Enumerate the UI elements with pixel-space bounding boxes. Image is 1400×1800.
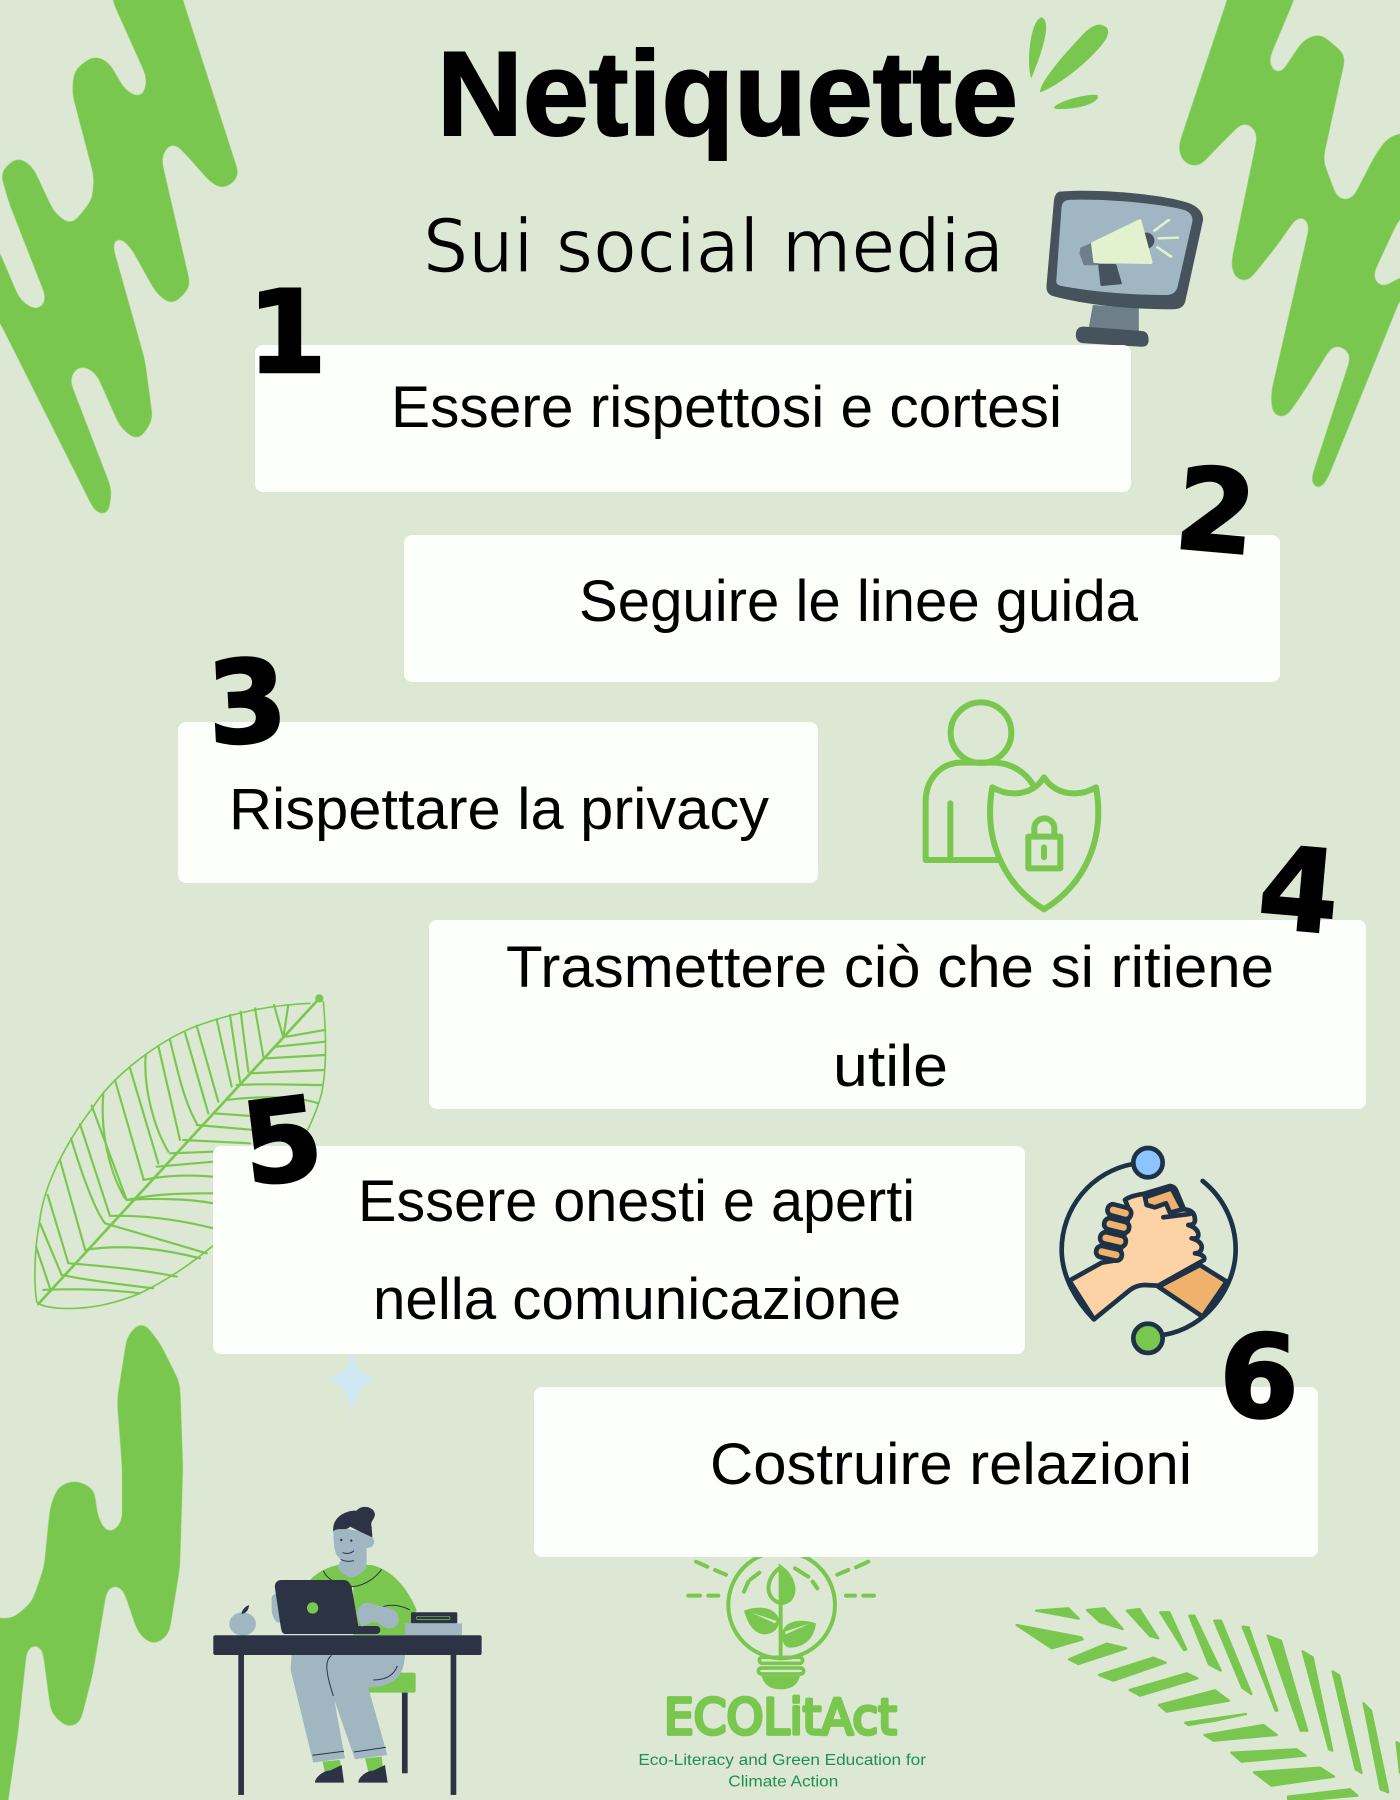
laptop: [272, 1580, 399, 1634]
panel: rule 4: [429, 821, 1366, 1109]
rule 4 text: Trasmettere ciò che si ritiene: [506, 935, 1274, 1000]
rule 2 text: Seguire le linee guida: [579, 569, 1139, 634]
rule 5 text: [358, 1169, 915, 1332]
panel: rule 2: [404, 442, 1280, 682]
illustration: person working at a desk: [213, 1507, 482, 1795]
illustration: outlined green leaf: [35, 995, 326, 1309]
number 4: 4: [1254, 821, 1344, 960]
rule 1 text: Essere rispettosi e cortesi: [391, 375, 1062, 440]
panel: rule 1: [247, 266, 1131, 492]
decoration: top-right green leaf blob: [1178, 0, 1400, 494]
logo tagline: [638, 1752, 926, 1791]
title: Netiquette: [437, 27, 1018, 161]
panel: rule 5: [213, 1071, 1025, 1354]
rule 5 text: Essere onesti e aperti: [358, 1169, 915, 1234]
number 2: 2: [1171, 442, 1261, 581]
number 3: 3: [204, 634, 290, 771]
panel: rule 3: [178, 634, 818, 883]
logo: ECOLitAct light bulb: [638, 1552, 926, 1791]
rule 4 text: utile: [833, 1034, 948, 1099]
logo tagline: Eco-Literacy and Green Education for: [638, 1752, 926, 1769]
icon: user with privacy shield: [926, 702, 1098, 909]
apple: [229, 1605, 256, 1636]
head: [323, 1507, 410, 1610]
number 6: 6: [1219, 1311, 1299, 1444]
icon: green splash by title: [1029, 17, 1108, 109]
logo bulb: [688, 1552, 874, 1674]
panel: rule 6: [534, 1311, 1318, 1557]
rule 4 text: [506, 935, 1274, 1099]
decoration: top-left green leaf blob: [0, 0, 240, 518]
logo tagline: Climate Action: [728, 1774, 838, 1791]
decoration: bottom-right palm frond: [1017, 1608, 1400, 1800]
number 5: 5: [235, 1071, 330, 1212]
icon: handshake in circle: [1062, 1148, 1236, 1353]
desk: [213, 1635, 482, 1795]
legs and shoes: [291, 1653, 405, 1783]
books: [405, 1612, 462, 1635]
number 1: 1: [247, 266, 327, 399]
rule 5 text: nella comunicazione: [373, 1267, 901, 1332]
stool: [367, 1673, 416, 1773]
icon: monitor with megaphone: [1046, 191, 1203, 347]
rule 6 text: Costruire relazioni: [710, 1432, 1192, 1497]
rule 3 text: Rispettare la privacy: [229, 777, 769, 842]
sparkle: [328, 1355, 375, 1412]
decoration: bottom-left green leaf blob: [0, 1320, 183, 1800]
logo wordmark: ECOLitAct: [664, 1690, 897, 1746]
subtitle: Sui social media: [423, 204, 1004, 290]
torso: [310, 1565, 417, 1635]
